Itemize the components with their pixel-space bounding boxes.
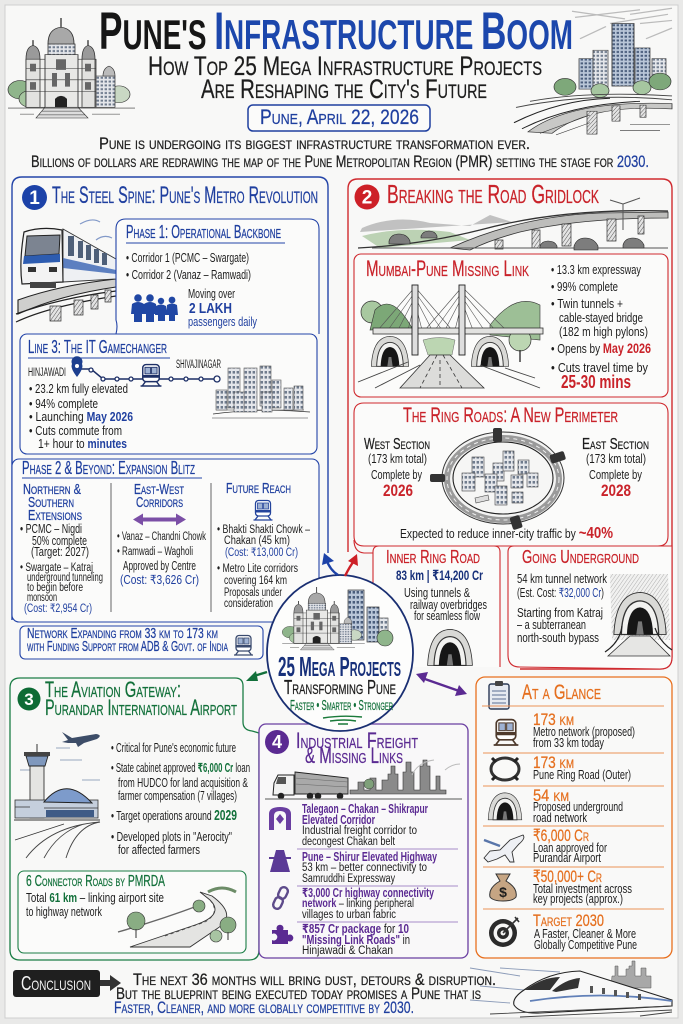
facts: missing link [551,263,651,392]
column: north south [20,481,103,615]
heading: phase 1: Phase 1: Operational Backbone [126,222,281,242]
west section: 2026 [383,481,413,500]
panel: line 3 [20,334,317,454]
underground text: Starting from Katraj [517,606,603,620]
airport facts: • Target operations around 2029 [111,807,237,824]
route diagram: HINJAWADI [28,367,66,379]
column: east west [117,481,206,587]
arrow: to section 2 [345,554,358,576]
icon: fork road [269,807,291,830]
column: north south: • Swargate – Katraj [20,562,93,574]
underground text: north-south bypass [517,631,599,645]
illustration: elevated road [358,198,668,250]
stat: total investment: Total investment across [533,882,632,896]
west section: West Section [364,436,430,453]
column: east west: East-West [134,481,184,498]
row: talegaon corridor [269,802,428,848]
underground text: – a subterranean [517,618,586,632]
underground text: 54 km tunnel network [517,572,608,586]
east section: (173 km total) [586,452,646,466]
heading: phase 2: Phase 2 & Beyond: Expansion Blitz [22,458,195,478]
facts: missing link: • Cuts travel time by [551,361,649,375]
heading: aviation gateway: Purandar International Airport [45,695,237,720]
heading: missing link: Mumbai-Pune Missing Link [366,256,529,281]
route diagram: SHIVAJINAGAR [176,359,221,371]
facts: missing link: • 99% complete [551,280,618,294]
talegaon text: Talegaon – Chakan – Shikrapur [302,802,428,816]
row: missing link roads [272,922,410,957]
badge 1: 1 [29,188,40,209]
stat: target 2030 [489,911,637,952]
icon: passengers [131,294,178,322]
column: future reach: • Bhakti Shakti Chowk – [217,524,310,536]
east section [582,436,649,500]
shirur text: 53 km – better connectivity to [302,862,427,874]
heading: inner ring: Inner Ring Road [386,547,480,567]
line 3 facts: • 94% complete [29,397,98,411]
talegaon text: Industrial freight corridor to [302,825,417,837]
stat: 2 lakh [188,287,258,329]
stat: metro network: 173 km [533,710,574,729]
column: future reach: Chakan (45 km) [224,535,290,547]
panel: going underground [508,546,672,669]
conclusion label: Conclusion [21,973,91,995]
panel: phase 2 [12,458,319,622]
illustration: ring road [430,428,566,530]
callout: network expansion [20,625,263,659]
connector text [26,891,164,919]
stat: total investment [490,867,632,906]
corridor list [126,251,251,282]
illustration: underground tunnel [605,574,672,656]
stat: target 2030: A Faster, Cleaner & More [534,927,636,941]
facts: missing link: 25-30 mins [561,372,631,392]
illustration: airport [14,732,100,858]
hub subheading: Transforming Pune [284,677,396,699]
conclusion text: But the blueprint being executed today promises a Pune that is [116,984,481,1003]
arrow: east west [133,514,186,526]
row: shirur highway [269,850,437,885]
conclusion text: Faster, Cleaner, and more globally competitive by 2030. [114,998,414,1017]
panel: inner ring road [354,540,500,667]
center hub: 25 mega projects [267,575,413,731]
icon: clipboard [489,681,509,709]
arrow: to section 3 [246,671,267,681]
ring road impact: Expected to reduce inner-city traffic by ~40% [400,525,613,542]
airport facts: • State cabinet approved ₹6,000 Cr loan [111,761,250,775]
panel: phase 1 [116,219,319,334]
column: future reach [217,480,310,610]
connector text: to highway network [26,905,103,919]
column: future reach: covering 164 km [224,575,287,587]
column: north south: Southern [28,494,74,511]
badge 3 [18,688,40,710]
west section: (173 km total) [368,452,427,466]
arrow: to section 1 [322,553,338,575]
stat: inner ring: 83 km | ₹14,200 Cr [396,567,483,583]
stat: underground: Proposed underground [533,800,623,814]
conclusion text: The next 36 months will bring dust, detours & disruption. [133,970,496,989]
column: east west: Approved by Centre [123,559,196,573]
stat: underground [488,786,623,825]
column: future reach: Future Reach [226,480,291,497]
row: connectivity network [272,886,434,921]
illustration: bullet train [470,961,672,1017]
connectivity text: network – linking peripheral [302,898,414,910]
heading: freight: & Missing Links [305,743,403,768]
column: north south: (Target: 2027) [31,545,89,559]
corridor list: • Corridor 2 (Vanaz – Ramwadi) [126,268,251,282]
panel: section 4 freight [259,724,468,958]
column: north south: • PCMC – Nigdi [20,522,82,536]
conclusion text [114,970,496,1017]
stat: airport loan: Purandar Airport [533,851,601,865]
airport facts: • Critical for Pune's economic future [111,741,236,755]
heading: at a glance: At a Glance [522,681,601,704]
missing link roads text: "Missing Link Roads" in [302,933,410,947]
title: PUNE'S INFRASTRUCTURE BOOM [99,2,573,61]
column: north south: to begin before [27,582,83,594]
panel: missing link [354,254,668,397]
shirur text [302,850,437,885]
heading: line 3: Line 3: The IT Gamechanger [28,337,167,357]
heading: underground: Going Underground [522,547,639,567]
inner ring text: for seamless flow [414,609,481,623]
stat: underground: 54 km [533,786,569,805]
icon: highway [269,850,291,872]
arrow: to at a glance [416,672,467,696]
airport facts: • Developed plots in "Aerocity" [111,830,232,844]
icon: puzzle [272,925,293,944]
panel: section 1 metro [12,177,328,659]
badge 3: 3 [24,690,34,709]
stat: airport loan: Loan approved for [533,841,607,855]
stat: airport loan: ₹6,000 Cr [533,826,589,845]
heading: connector roads: 6 Connector Roads by PMRDA [26,873,165,890]
stat: ring road [491,753,631,782]
inner ring text: railway overbridges [410,598,487,612]
intro text: Pune is undergoing its biggest infrastructure transformation ever. [99,134,530,153]
stat: ring road: 173 km [533,753,574,772]
stat: total investment: ₹50,000+ Cr [533,867,602,886]
column: north south: Extensions [28,507,82,524]
stat: 2 lakh: passengers daily [188,315,258,329]
column: north south: Northern & [23,481,81,498]
illustration: city [212,366,310,418]
facts: missing link: (182 m high pylons) [559,325,648,339]
illustration: connector road [118,888,236,947]
stat: metro network: from 33 km today [533,736,605,750]
subtitle: How Top 25 Mega Infrastructure Projects [148,51,542,81]
stat: underground: road network [533,811,588,825]
column: future reach: • Metro Lite corridors [217,563,298,575]
illustration: hub skyline [282,587,393,650]
route diagram [28,356,221,386]
talegaon text: decongest Chakan belt [302,836,396,848]
missing link roads text: ₹857 Cr package for 10 [302,922,409,936]
east section: 2028 [601,481,631,500]
missing link roads text [302,922,410,957]
illustration: cable-stayed bridge [358,285,543,388]
illustration: metro train [16,220,116,322]
facts: missing link: cable-stayed bridge [559,311,643,325]
facts: missing link: • Opens by May 2026 [551,341,651,356]
heading: aviation gateway: The Aviation Gateway: [45,677,181,702]
panel: at a glance [476,677,672,958]
column: north south: monsoon [27,592,57,604]
inner ring text [404,586,487,623]
subtitle [148,51,542,104]
date badge: Pune, April 22, 2026 [260,106,419,129]
column: future reach: (Cost: ₹13,000 Cr) [225,547,298,559]
icon: chain [272,886,289,910]
airport facts: for affected farmers [118,843,200,857]
underground text: (Est. Cost: ₹32,000 Cr) [517,586,604,600]
panel: section 2 roads [10,179,672,1017]
column: east west: Corridors [136,494,183,511]
heading: freight: Industrial Freight [296,728,418,753]
badge 1 [22,185,47,210]
stat: ring road: Pune Ring Road (Outer) [533,768,631,782]
stat: target 2030: Globally Competitive Pune [534,938,637,952]
east section: Complete by [589,468,643,482]
column: north south: 50% complete [32,534,87,548]
column: future reach: Proposals under [224,587,282,599]
talegaon text [302,802,428,848]
column: east west: (Cost: ₹3,626 Cr) [120,573,199,587]
line 3 facts: • Launching May 2026 [29,410,133,424]
line 3 facts [29,382,133,451]
facts: missing link: • 13.3 km expressway [551,263,642,277]
badge 4 [265,730,289,754]
stat: metro network: Metro network (proposed) [533,725,635,739]
connectivity text [302,886,434,921]
illustration: tunnel [428,629,472,665]
west section: Complete by [371,468,423,482]
airport facts [111,741,250,857]
column: north south: underground tunneling [27,572,103,584]
panel: section 3 airport [10,677,259,960]
line 3 facts: • Cuts commute from [29,424,122,438]
subtitle: Are Reshaping the City's Future [201,74,487,104]
badge 4: 4 [272,732,282,752]
panel: connector roads [18,871,246,953]
shirur text: Samruddhi Expressway [302,873,395,885]
line 3 facts: • 23.2 km fully elevated [29,382,128,396]
column: future reach: consideration [224,598,273,610]
column: east west: • Vanaz – Chandni Chowk [117,531,206,543]
missing link roads text: Hinjawadi & Chakan [302,945,393,957]
badge 2: 2 [362,188,372,208]
shirur text: Pune – Shirur Elevated Highway [302,850,437,864]
airport facts: from HUDCO for land acquisition & [118,776,248,790]
illustration: skyline and flyover [514,8,672,135]
stat: total investment: key projects (approx.) [533,892,623,906]
hub heading: 25 Mega Projects [278,651,401,682]
east section: East Section [582,436,649,453]
column: north south: (Cost: ₹2,954 Cr) [24,603,92,615]
west section [364,436,430,500]
callout: network expansion: Network Expanding from 33 km to 173 km [27,625,218,642]
heading: freight [296,728,418,768]
line 3 facts: 1+ hour to minutes [38,437,127,451]
facts: missing link: • Twin tunnels + [551,297,623,311]
stat: 2 lakh: 2 LAKH [189,300,232,317]
connector text: Total 61 km – linking airport site [26,891,164,905]
corridor list: • Corridor 1 (PCMC – Swargate) [126,251,249,265]
panel: ring roads [354,403,668,546]
talegaon text: Elevated Corridor [302,813,375,827]
callout: network expansion: with Funding Support from ADB & Govt. of India [27,638,228,655]
badge 2 [354,184,380,210]
stat: airport loan [484,826,607,865]
stat: metro network [494,710,635,750]
stat: total investment: $ [499,884,507,900]
inner ring text: Using tunnels & [404,586,470,600]
underground text [517,572,608,645]
heading: steel spine: The Steel Spine: Pune's Metro Revolution [52,182,318,209]
connectivity text: villages to urban fabric [302,909,396,921]
illustration: truck and skyline [265,760,462,799]
airport facts: farmer compensation (7 villages) [118,789,237,803]
heading: aviation gateway [45,677,237,720]
stat: 2 lakh: Moving over [188,287,235,301]
stat: target 2030: Target 2030 [533,911,604,930]
hub tagline: Faster • Smarter • Stronger [290,697,393,714]
column: east west: • Ramwadi – Wagholi [117,546,193,558]
illustration: palace [8,18,135,118]
intro text [31,134,649,171]
connectivity text: ₹3,000 Cr highway connectivity [302,886,434,900]
